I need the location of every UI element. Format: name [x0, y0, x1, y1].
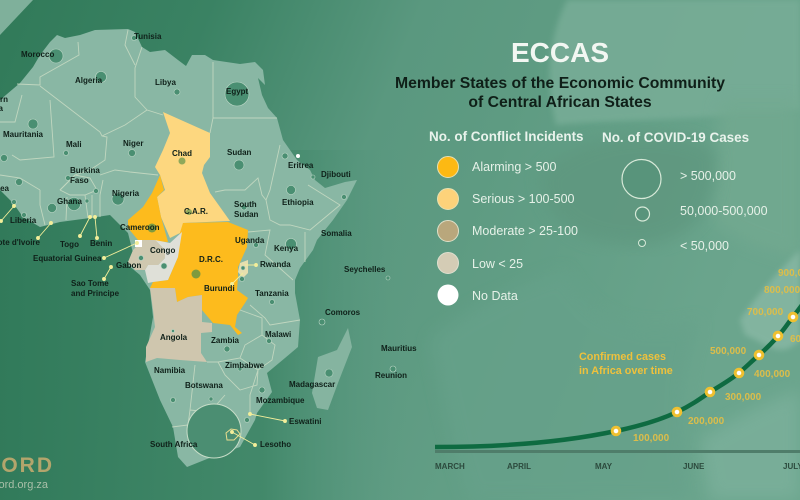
country labels: Liberia: [10, 216, 37, 225]
legend: conflict incidents: Alarming > 500: [472, 160, 556, 174]
country labels: Botswana: [185, 381, 223, 390]
country labels: Rwanda: [260, 260, 291, 269]
land: African continent: [0, 29, 357, 467]
legend: conflict incidents: No. of Conflict Incidents: [429, 129, 584, 144]
country labels: Burkina: [70, 166, 100, 175]
member state: D.R.C.: [150, 222, 248, 335]
country labels: Morocco: [21, 50, 54, 59]
month labels: APRIL: [507, 462, 531, 471]
country labels: Mauritania: [3, 130, 44, 139]
country labels: Zambia: [211, 336, 240, 345]
country labels: Togo: [60, 240, 79, 249]
legend: conflict incidents: Moderate > 25-100: [472, 224, 578, 238]
member state: Equatorial Guinea: [135, 240, 142, 247]
country labels: C.A.R.: [184, 207, 208, 216]
country labels: Chad: [172, 149, 192, 158]
legend: conflict incidents: Low < 25: [472, 257, 523, 271]
country labels: Tunisia: [134, 32, 162, 41]
country labels: Sudan: [234, 210, 259, 219]
country labels: Sudan: [227, 148, 252, 157]
country labels: Madagascar: [289, 380, 335, 389]
legend: COVID-19 cases: [602, 130, 768, 253]
country labels: Seychelles: [344, 265, 386, 274]
chart caption: Confirmed cases: [579, 351, 666, 363]
value labels: 100,000: [633, 433, 670, 444]
country labels: Eswatini: [289, 417, 321, 426]
country labels: South Africa: [150, 440, 198, 449]
country labels: Malawi: [265, 330, 291, 339]
member state: Gabon: [128, 240, 165, 270]
value labels: 200,000: [688, 416, 725, 427]
land: Madagascar: [312, 328, 352, 410]
country labels: Sao Tome: [71, 279, 109, 288]
chart caption: [579, 351, 673, 377]
month labels: MARCH: [435, 462, 465, 471]
Lesotho outline: [226, 429, 240, 440]
subtitle: [395, 75, 725, 111]
country labels: Uganda: [235, 236, 265, 245]
national borders: [0, 30, 340, 427]
country labels: South: [234, 200, 257, 209]
country labels: Lesotho: [260, 440, 291, 449]
country labels: Namibia: [154, 366, 186, 375]
country labels: Djibouti: [321, 170, 351, 179]
curve markers: [612, 313, 797, 435]
country labels: Zimbabwe: [225, 361, 265, 370]
map of Africa: [0, 0, 417, 467]
country labels: Egypt: [226, 87, 249, 96]
legend: conflict incidents: Serious > 100-500: [472, 192, 575, 206]
country labels: Reunion: [375, 371, 407, 380]
member state: Congo: [145, 232, 182, 283]
logo wordmark: [0, 454, 54, 491]
country labels: Angola: [160, 333, 188, 342]
member state: Angola: [146, 288, 212, 362]
member state: Cameroon: [128, 175, 168, 242]
country labels: Faso: [70, 176, 89, 185]
country labels: Equatorial Guinea: [33, 254, 102, 263]
legend: conflict incidents: [429, 129, 584, 306]
legend: COVID-19 cases: No. of COVID-19 Cases: [602, 130, 749, 145]
value labels: [633, 268, 800, 444]
month labels: JUNE: [683, 462, 705, 471]
country labels: D.R.C.: [199, 255, 223, 264]
line chart: confirmed cases over time: [435, 268, 800, 471]
country labels: Nigeria: [112, 189, 140, 198]
country labels: Eritrea: [288, 161, 314, 170]
country labels: Algeria: [75, 76, 103, 85]
country labels: Ethiopia: [282, 198, 314, 207]
title: ECCAS: [511, 37, 609, 68]
member state: Rwanda and Burundi: [238, 260, 248, 278]
country labels: Mozambique: [256, 396, 305, 405]
land: Europe corner: [0, 0, 33, 35]
axis: [435, 450, 800, 453]
country labels: Comoros: [325, 308, 361, 317]
country labels: Somalia: [321, 229, 352, 238]
country labels: Niger: [123, 139, 143, 148]
photo: masked health worker: [430, 0, 800, 500]
leader lines: [0, 204, 286, 446]
country labels: Ghana: [57, 197, 82, 206]
South Africa large case bubble: [187, 404, 241, 458]
country labels: Burundi: [204, 284, 235, 293]
legend: COVID-19 cases: < 50,000: [680, 239, 729, 253]
country labels: Libya: [155, 78, 176, 87]
legend: COVID-19 cases: > 500,000: [680, 169, 736, 183]
country labels: Mauritius: [381, 344, 417, 353]
value labels: 700,000: [747, 307, 784, 318]
country labels: Cameroon: [120, 223, 160, 232]
value labels: 500,000: [710, 346, 747, 357]
legend: conflict incidents: No Data: [472, 289, 518, 303]
country labels: Gabon: [116, 261, 141, 270]
subtitle: of Central African States: [468, 94, 652, 111]
country labels: Kenya: [274, 244, 299, 253]
COVID-19 case bubbles: [0, 36, 396, 422]
country labels: Benin: [90, 239, 112, 248]
curve: [435, 305, 800, 447]
country labels: and Principe: [71, 289, 120, 298]
chart caption: in Africa over time: [579, 365, 673, 377]
value labels: 800,000: [764, 285, 800, 296]
subtitle: Member States of the Economic Community: [395, 75, 725, 92]
value labels: 300,000: [725, 392, 762, 403]
value labels: 400,000: [754, 369, 791, 380]
legend: COVID-19 cases: 50,000-500,000: [680, 204, 768, 218]
country labels: Congo: [150, 246, 175, 255]
month labels: [435, 462, 800, 471]
month labels: MAY: [595, 462, 613, 471]
country labels: Tanzania: [255, 289, 289, 298]
country labels: [0, 32, 417, 449]
country labels: Mali: [66, 140, 82, 149]
member state: Chad and C.A.R.: [155, 112, 230, 238]
